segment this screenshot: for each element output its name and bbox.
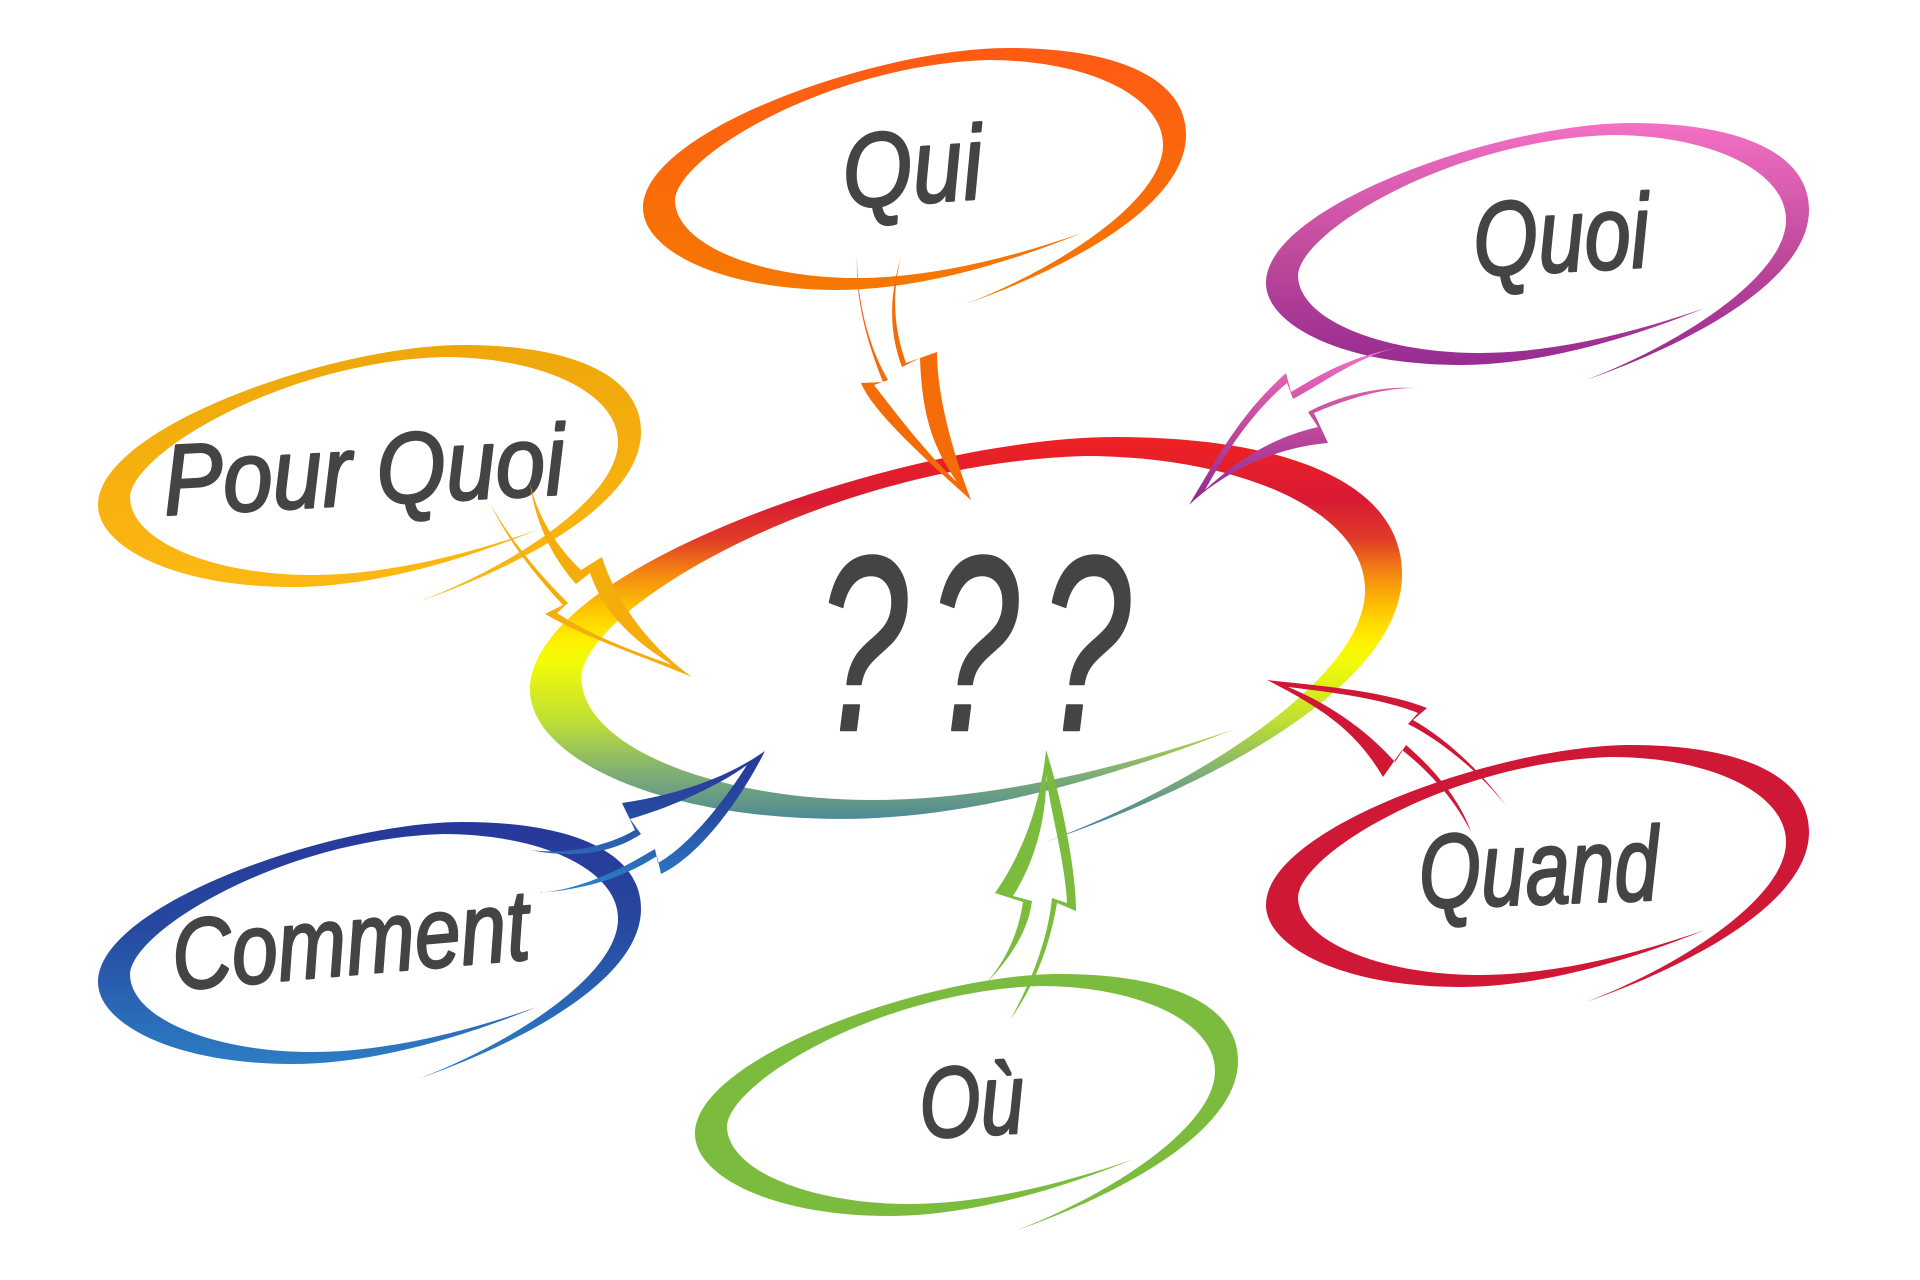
bubble: Comment xyxy=(98,822,641,1079)
bubble: Pour Quoi xyxy=(98,345,641,602)
arrow: Quand to centre xyxy=(1267,680,1507,832)
central ellipse group xyxy=(530,437,1402,843)
text: Où: Où xyxy=(916,1043,1027,1160)
arrow: Pour Quoi to centre xyxy=(490,483,692,677)
bubble: Quoi xyxy=(1266,123,1809,380)
arrow: Quoi to centre xyxy=(1189,347,1415,505)
arrow: Qui to centre xyxy=(857,257,971,500)
text: Pour Quoi: Pour Quoi xyxy=(160,404,570,537)
text: Qui: Qui xyxy=(838,104,989,231)
text: question marks: ??? xyxy=(817,504,1130,783)
ellipse: central rainbow ring xyxy=(530,437,1402,843)
text: Quand: Quand xyxy=(1417,806,1663,931)
arrow: Comment to centre xyxy=(530,751,765,893)
bubble: Où xyxy=(695,974,1238,1231)
ellipse: Quand ring xyxy=(1266,745,1809,1002)
bubble: Qui xyxy=(643,48,1186,305)
ellipse: Quoi ring xyxy=(1266,123,1809,380)
ellipse: Qui ring xyxy=(643,48,1186,305)
ellipse: Pour Quoi ring xyxy=(98,345,641,602)
ellipse: Où ring xyxy=(695,974,1238,1231)
text: Quoi: Quoi xyxy=(1470,173,1654,299)
ellipse: Comment ring xyxy=(98,822,641,1079)
text: Comment: Comment xyxy=(167,869,537,1012)
arrow: Où to centre xyxy=(977,750,1076,1020)
bubble: Quand xyxy=(1266,745,1809,1002)
